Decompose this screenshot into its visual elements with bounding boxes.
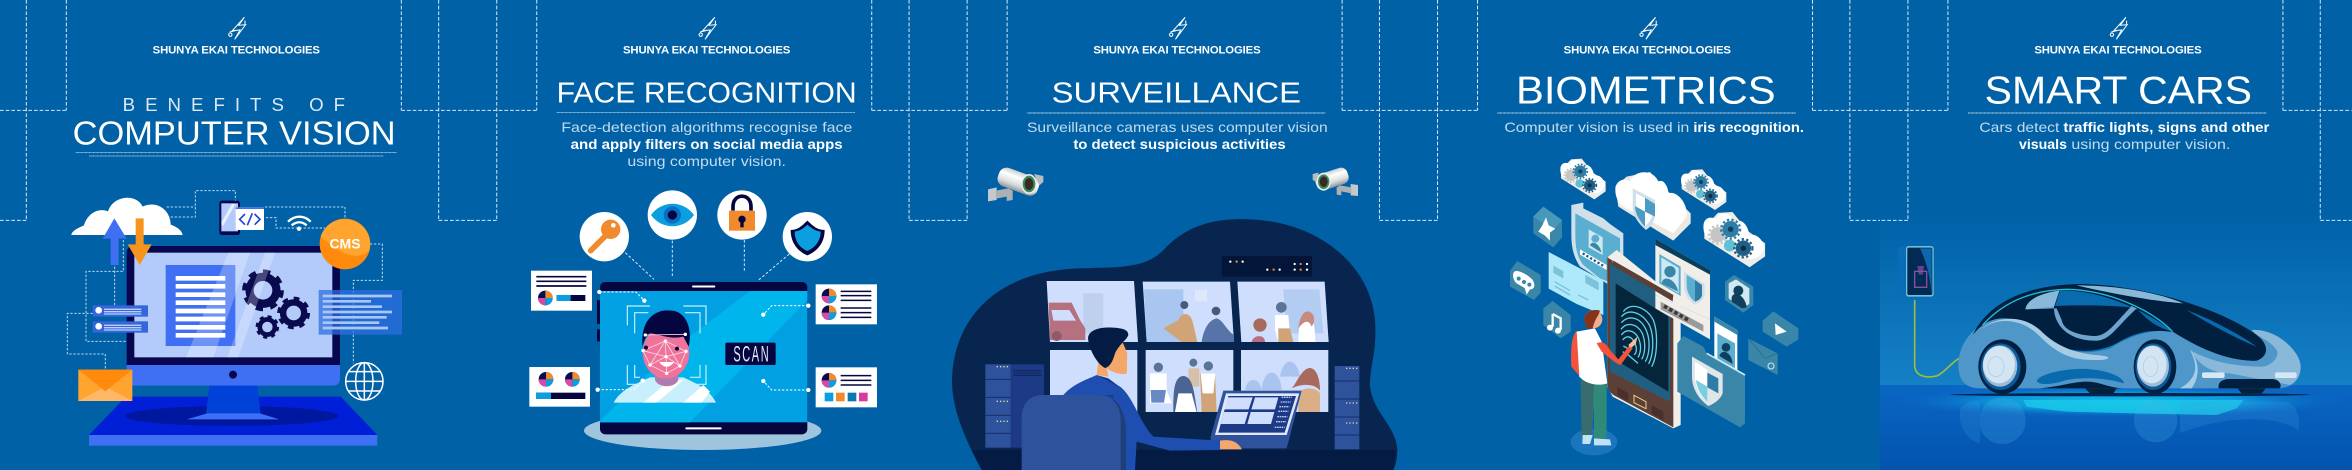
logo: Shunya Ekai: SHUNYA EKAI TECHNOLOGIES [2034,44,2202,56]
heading: FACE RECOGNITION [557,78,857,110]
heading: benefits of: BENEFITS OF [123,94,345,115]
front fender [2190,330,2301,385]
panel: benefits of computer vision [0,0,470,446]
description: traffic lights, signs and other [2063,119,2270,135]
headlights [2202,372,2297,378]
description: visuals [2019,136,2067,152]
data card: top right [816,284,877,324]
panel: surveillance [941,0,1411,470]
tyres under body [2080,383,2270,393]
server rack left [985,364,1044,448]
dark blob backdrop [952,219,1397,470]
card details [1554,267,1598,300]
logo: Shunya Ekai: SHUNYA EKAI TECHNOLOGIES [1093,44,1261,56]
icon: eye [648,190,697,240]
window glass [1973,284,2266,361]
reflective floor [1880,385,2352,470]
car reflection [1960,397,2299,444]
icon: padlock [717,190,767,240]
description: iris recognition. [1693,119,1804,135]
heading underline [1968,111,2267,114]
logo: Shunya Ekai [1093,17,1261,56]
recorder box [1222,256,1312,277]
front wheel [2134,339,2198,394]
charging cable [1915,298,1959,377]
upload arrow [103,218,127,265]
side sill [2037,369,2124,384]
floor glow [1893,386,2347,418]
description [1027,119,1328,152]
profile window [1655,239,1710,319]
logo: Shunya Ekai: SHUNYA EKAI TECHNOLOGIES [1564,44,1731,56]
bank card [1549,252,1603,315]
CMS badge: CMS [329,236,361,252]
windshield highlight [2055,291,2173,332]
roof highlight [2077,285,2183,303]
face with landmark mesh [614,310,716,403]
monitor: women feed [1237,282,1329,342]
heading underline [1497,111,1796,114]
scan focus brackets [627,306,706,384]
monitor: crowd feed [1241,350,1328,412]
description: Computer vision is used in [1504,119,1689,135]
description: and apply filters on social media apps [571,136,843,152]
brown window bar [1612,261,1673,301]
tablet console [1211,391,1302,448]
logo: Shunya Ekai [1564,17,1731,56]
video wall [1047,281,1329,412]
cloud with shield [1615,172,1691,241]
description [561,119,853,169]
monitor: group feed [1146,350,1233,412]
body side crease [1980,319,2108,360]
car [1958,284,2301,394]
monitor [127,246,340,419]
icon: globe [346,363,383,400]
logo: Shunya Ekai: SHUNYA EKAI TECHNOLOGIES [623,44,791,56]
description: using computer vision. [627,153,786,169]
server rack right [1335,366,1359,449]
isometric gear clouds [1560,159,1765,267]
laptop callout lines [595,290,810,392]
description [1979,119,2270,152]
car body [1958,318,2301,388]
phone and code window [219,201,264,235]
shield with profile [1571,203,1623,287]
desk surface [972,450,1397,470]
connector lines [67,191,382,369]
envelope [78,370,132,401]
hex icon: star [1533,207,1562,247]
desk [89,397,377,446]
user comment cards [93,305,148,333]
icon: right security camera [1313,166,1358,196]
document on screen [166,265,235,346]
data card: top left [531,271,592,311]
connector lines [625,240,789,280]
description: using computer vision. [2071,136,2230,152]
description: Cars detect [1979,119,2059,135]
panel: biometrics [1411,0,1881,455]
heading: BIOMETRICS [1516,69,1776,112]
icon: key [580,212,629,261]
roof edge [1973,284,2267,362]
data card: bottom right [816,367,877,407]
monitor: vehicle feed [1047,281,1138,342]
rear wheel [1978,339,2026,394]
door pillar [2027,291,2137,341]
hex icon: chat [1510,261,1541,300]
charging station [1898,246,1934,300]
heading underline [1027,111,1325,114]
download arrow [128,218,152,265]
icon: wifi [288,217,311,230]
operator [1040,327,1242,470]
hex icon: music [1543,301,1571,338]
icon: shield [783,212,832,261]
person pressing fingerprint [1571,310,1637,455]
CMS badge [320,219,370,269]
floating code panel [319,290,402,335]
car shadow [1950,393,2310,396]
description: Face-detection algorithms recognise face [561,119,853,135]
heading: SURVEILLANCE [1052,78,1301,110]
smartphone [1607,250,1681,428]
heading: SMART CARS [1985,69,2252,112]
folder with shield [1677,336,1745,427]
monitor: two men feed [1143,282,1234,342]
password bar [1655,295,1710,339]
heading underline [76,152,397,156]
monitor: blank feed [1050,350,1137,412]
panel: smart cars [1880,0,2352,470]
panel: face recognition [470,0,940,450]
icon: left security camera [988,165,1043,201]
cloud [71,198,183,235]
logo: Shunya Ekai [623,17,791,56]
backdrop gradient [1880,213,2352,385]
heading underline [557,111,855,114]
user data card [1714,317,1737,370]
logo: Shunya Ekai [153,17,320,56]
heading: computer vision: COMPUTER VISION [73,115,396,152]
SCAN label: SCAN [733,341,769,367]
hex icon: play [1763,311,1798,347]
fingerprint [1621,306,1657,367]
laptop [584,282,821,450]
front intake [2218,379,2281,388]
data card: bottom left [529,367,590,407]
hex icon: profile [1725,275,1753,313]
logo: Shunya Ekai: SHUNYA EKAI TECHNOLOGIES [153,44,320,56]
chair [1022,395,1126,470]
gears [244,272,308,337]
roofline accent [1983,289,2173,332]
envelope tile [1748,338,1778,375]
description: to detect suspicious activities [1073,136,1286,152]
logo: Shunya Ekai [2034,17,2202,56]
description: Surveillance cameras uses computer vision [1027,119,1328,135]
description [1504,119,1804,135]
